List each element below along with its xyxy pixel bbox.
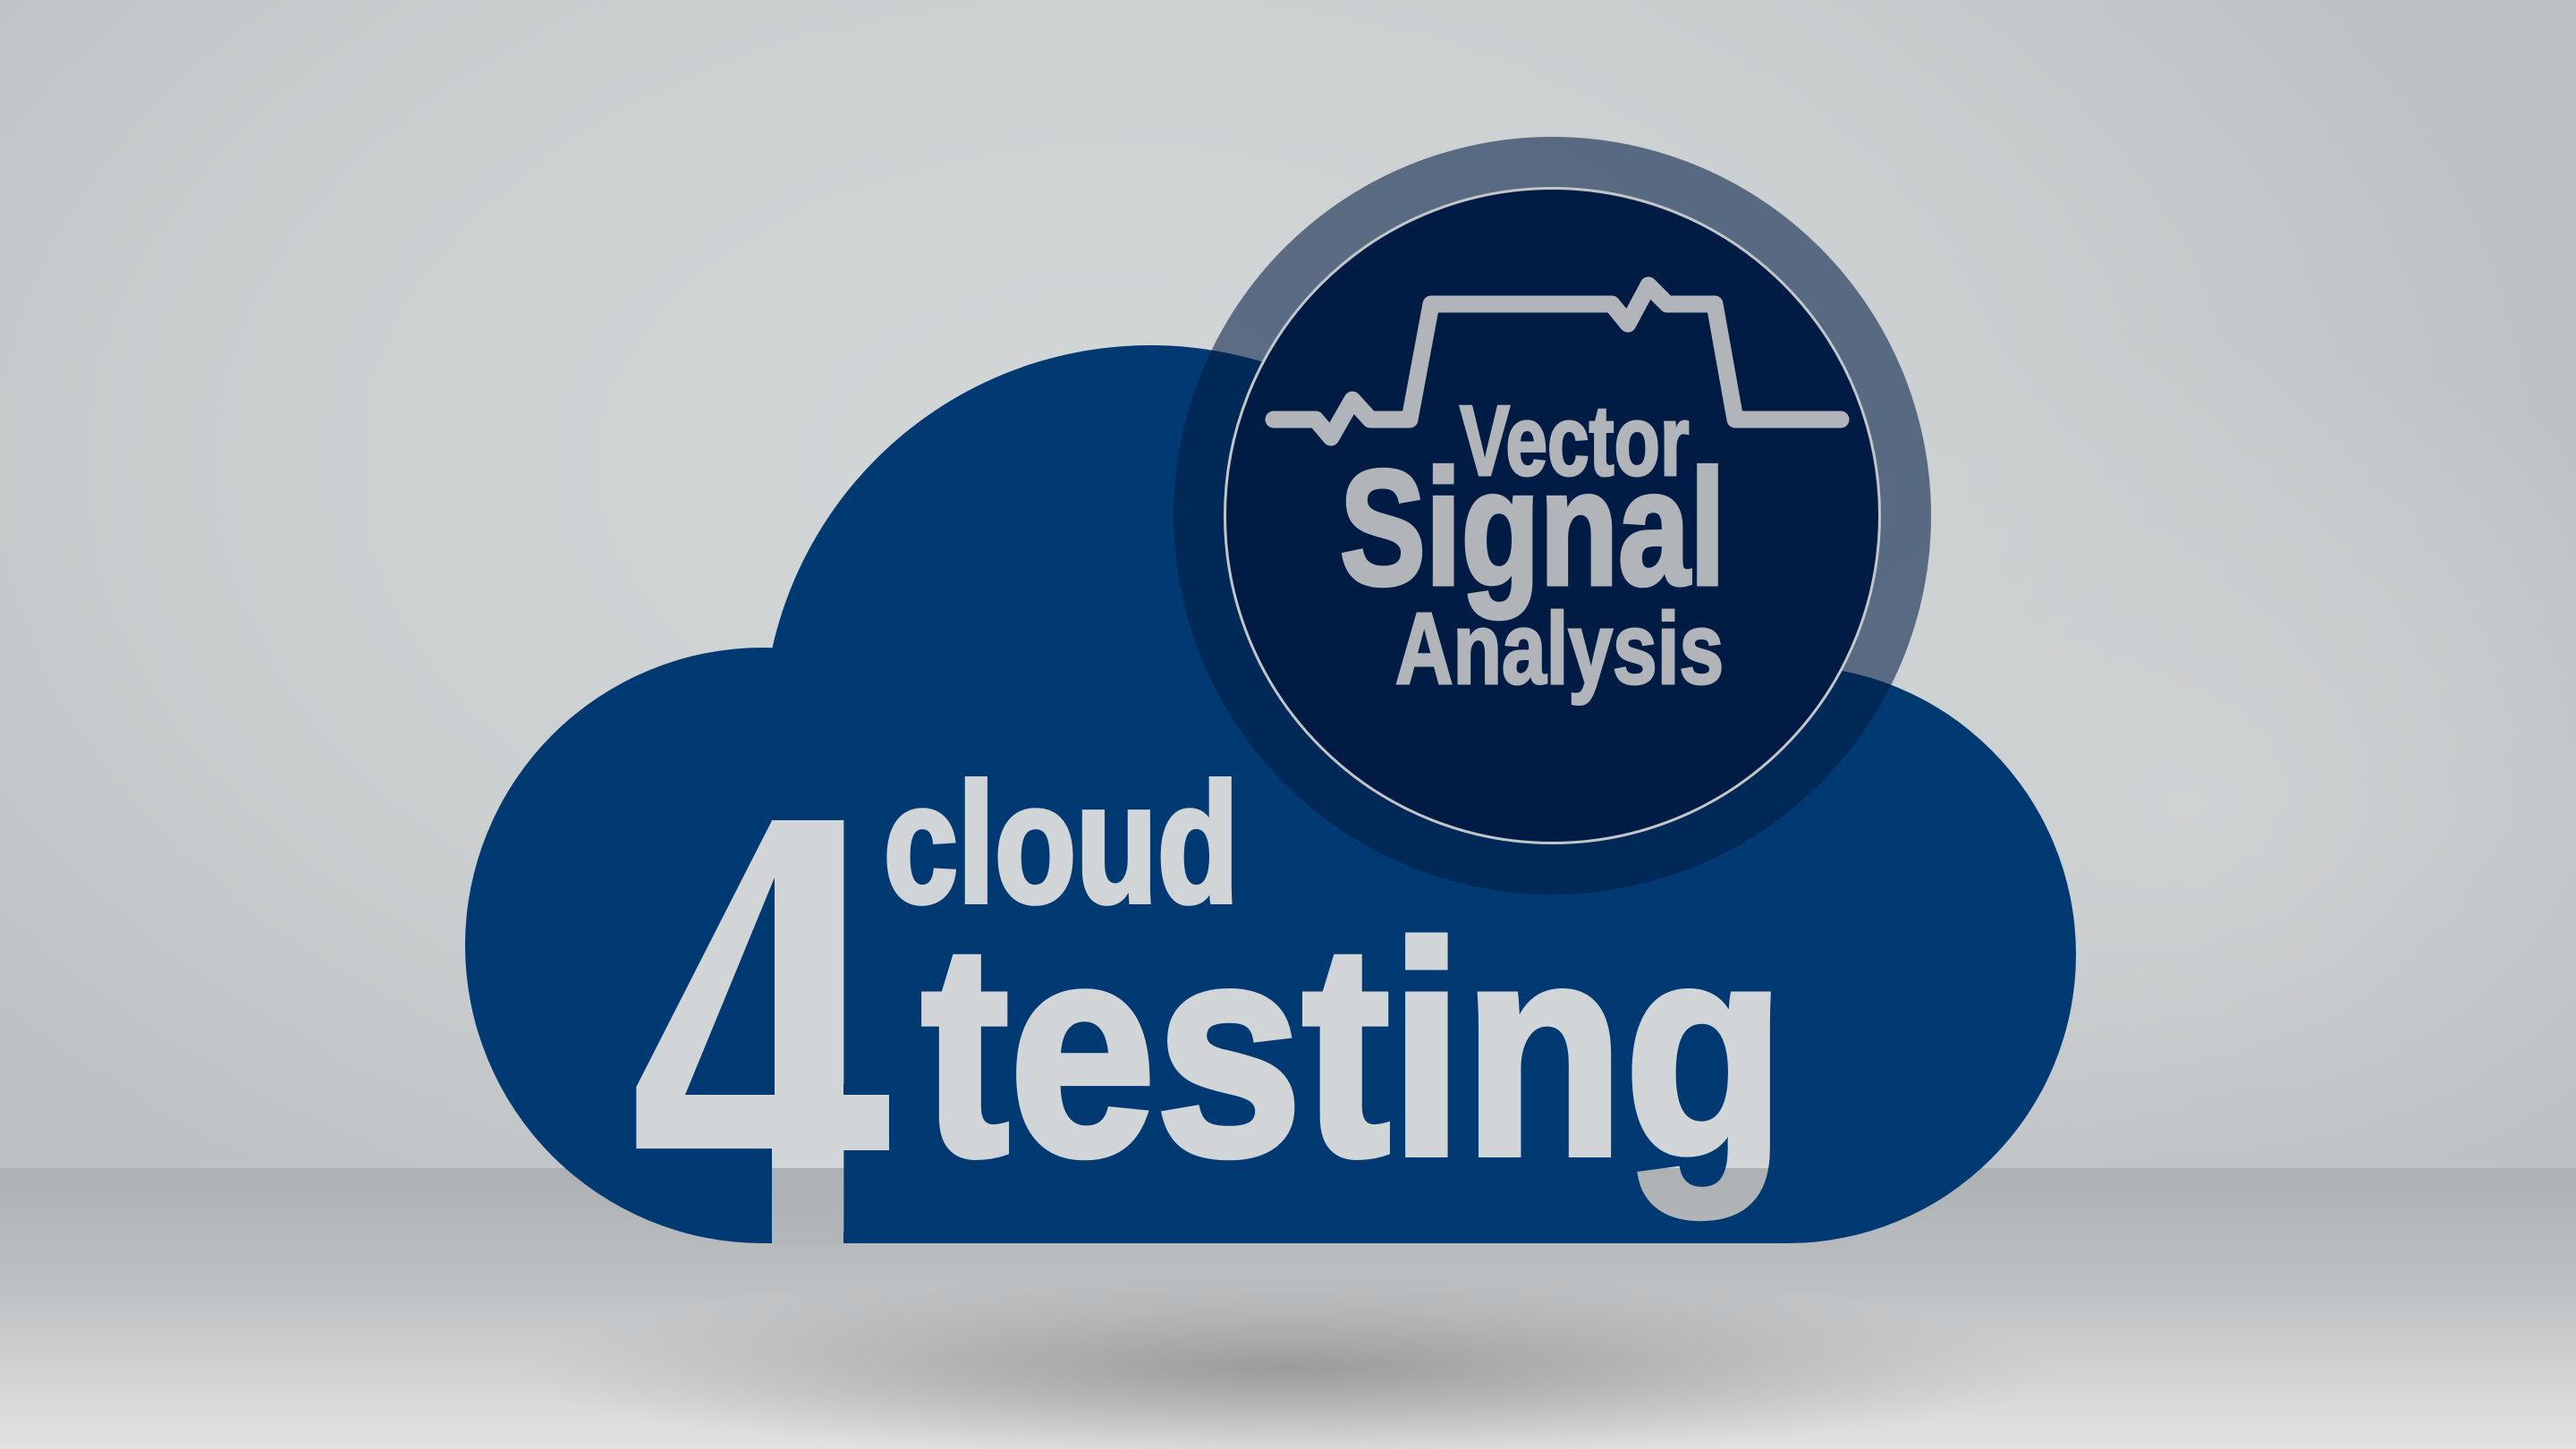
background floor [0,1168,2576,1449]
text: Signal: Signal [1340,436,1725,619]
text: Vector: Vector [1460,386,1689,496]
word: testing: testing [921,882,1785,1219]
text: Analysis: Analysis [1395,592,1724,705]
numeral 4: 4 [629,691,892,1360]
floor shadow under cloud [519,1274,2057,1449]
badge disc [1225,188,1880,843]
background wall glow [1565,340,2576,1270]
cloud shape [465,345,2076,1243]
icon: signal waveform [1274,285,1841,437]
badge: vector signal analysis [1225,188,1880,843]
word: cloud: cloud [884,750,1239,938]
translucent ring around badge [1174,137,1931,894]
